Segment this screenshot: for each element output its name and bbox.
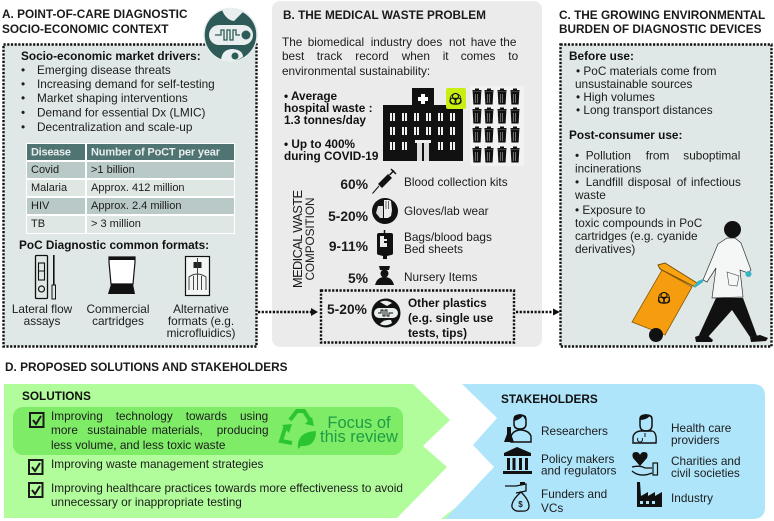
composition row: gloves [328, 198, 489, 224]
blue chevron background [445, 384, 765, 519]
table: PoCT per year: > 3 million [91, 218, 141, 230]
icon: microfluidic format [186, 256, 210, 296]
composition row: bags: Bed sheets [404, 242, 463, 256]
format labels: Commercial [87, 302, 149, 316]
before use list: • PoC materials come from [576, 64, 717, 78]
stakeholder: policy makers [503, 447, 617, 478]
solution 1: technology: technology [116, 409, 173, 423]
post-consumer list: • [575, 148, 579, 162]
format labels [12, 302, 235, 340]
post-consumer list: disposal [628, 175, 671, 189]
solution 1: technology: Improving [51, 409, 103, 423]
logo: diagnostic device circle [204, 8, 257, 61]
market drivers list: Market shaping interventions [37, 91, 188, 105]
post-consumer list: of [677, 175, 687, 189]
panel C heading [559, 8, 765, 36]
stakeholder: health care providers: Health care [671, 421, 732, 435]
panel B: medical waste problem [272, 1, 542, 347]
post-consumer list: infectious [691, 175, 741, 189]
panel C dotted box [560, 44, 772, 346]
focus highlight band [13, 407, 403, 455]
stakeholder: funders: Funders and [541, 487, 607, 501]
icon: orange biohazard bin [632, 263, 697, 342]
dotted callout: other plastics: 5-20% [327, 302, 367, 317]
panel B intro text: when [401, 49, 430, 63]
market drivers list [21, 49, 215, 134]
panel D: solutions chevron [4, 384, 450, 518]
stakeholder: funders: VCs [541, 501, 563, 515]
composition row: nursery items [348, 266, 478, 286]
panel B intro text: the [500, 35, 517, 49]
hospital waste statistics: • Average [284, 89, 338, 103]
solution 1: technology: producing [217, 423, 269, 437]
hospital waste statistics [284, 89, 379, 163]
stakeholder: health care providers [633, 414, 732, 447]
solution 1: technology: sustainable [87, 423, 147, 437]
post-consumer list: Landfill [586, 175, 623, 189]
stakeholder: charities: Charities and [671, 454, 741, 468]
panel B intro text: it [443, 49, 449, 63]
composition row: nursery items: Nursery Items [404, 270, 478, 284]
icon: hospital [383, 88, 463, 161]
composition row: gloves: 5-20% [328, 209, 368, 224]
stakeholder: charities: civil societies [671, 466, 740, 480]
panel D heading: D. PROPOSED SOLUTIONS AND STAKEHOLDERS [5, 360, 288, 374]
composition row: gloves: Gloves/lab wear [404, 204, 489, 218]
panel B intro text: record [355, 49, 389, 63]
post-consumer list: cartridges (e.g. cyanide [575, 229, 698, 243]
panel B intro text: environmental sustainability: [282, 64, 430, 78]
market drivers list: Demand for essential Dx (LMIC) [37, 106, 206, 120]
panel B intro text: comes [461, 49, 496, 63]
stakeholder: health care providers: providers [671, 433, 720, 447]
icon: lateral flow assay [36, 255, 56, 299]
table: PoCT per year: Number of PoCT per year [91, 146, 221, 158]
market drivers list: Decentralization and scale-up [37, 120, 193, 134]
before use list: • High volumes [576, 90, 655, 104]
panel A heading: SOCIO-ECONOMIC CONTEXT [2, 22, 169, 36]
solution 3: healthcare practices: unnecessary or inappropriate testing [51, 495, 242, 509]
post-consumer list: incinerations [575, 162, 641, 176]
panel B intro text: not [449, 35, 466, 49]
icon: biohazard sign [446, 88, 466, 109]
market drivers list: Emerging disease threats [37, 63, 171, 77]
market drivers list: Increasing demand for self-testing [37, 77, 215, 91]
icon: worker in lab coat [693, 221, 768, 342]
dotted callout: other plastics [321, 290, 514, 342]
hospital waste statistics: • Up to 400% [284, 137, 356, 151]
stakeholder: charities [632, 452, 741, 480]
panel C: environmental burden [559, 8, 772, 346]
focus of this review label: Focus of [327, 414, 391, 432]
panel B intro text: industry [371, 35, 412, 49]
panel B intro text [282, 35, 519, 78]
post-consumer list: Pollution [586, 148, 631, 162]
table: PoCT per year: Approx. 2.4 million [91, 200, 182, 212]
panel B intro text: biomedical [308, 35, 364, 49]
panel C heading: C. THE GROWING ENVIRONMENTAL [559, 8, 765, 22]
before use list: • Long transport distances [576, 103, 713, 117]
before use list: unsustainable sources [575, 77, 692, 91]
stakeholder: industry: Industry [671, 491, 713, 505]
format labels: Alternative [173, 302, 229, 316]
green corner remnant [441, 507, 456, 519]
panel A dotted box [4, 44, 256, 346]
panel B heading: B. THE MEDICAL WASTE PROBLEM [283, 8, 486, 22]
table: PoCT per year: Approx. 412 million [91, 182, 185, 194]
solution 1: technology [30, 409, 269, 452]
green chevron background [4, 384, 450, 518]
focus of this review label [320, 414, 398, 446]
stakeholder: researchers: Researchers [541, 424, 608, 438]
before use list: Before use: [569, 49, 634, 63]
panel B intro text: track [317, 49, 342, 63]
dotted callout: other plastics: (e.g. single use [408, 311, 494, 325]
icon: recycling arrows with leaf [281, 411, 316, 449]
format labels: cartridges [92, 314, 144, 328]
rotated label: medical waste composition: MEDICAL WASTE [290, 190, 305, 288]
panel C heading: BURDEN OF DIAGNOSTIC DEVICES [559, 22, 762, 36]
icon: commercial cartridge [108, 256, 136, 294]
dotted callout: other plastics: tests, tips) [408, 326, 467, 340]
dotted callout: other plastics: Other plastics [408, 296, 487, 310]
composition row: nursery items: 5% [348, 271, 368, 286]
solution 1: technology: towards [186, 409, 227, 423]
composition row: bags: Bags/blood bags [404, 230, 492, 244]
hospital waste statistics: during COVID-19 [284, 149, 379, 163]
hospital waste statistics: hospital waste : [284, 101, 372, 115]
format labels: assays [24, 314, 60, 328]
format labels: Lateral flow [12, 302, 73, 316]
solution 1: technology: using [240, 409, 268, 423]
market drivers list: • [21, 91, 25, 105]
stakeholder: funders [505, 482, 607, 515]
arrow: panel B to panel C [516, 308, 560, 316]
solution 1: technology: materials, [152, 423, 203, 437]
stakeholder: industry [637, 482, 713, 507]
post-consumer list: from [646, 148, 669, 162]
format labels: microfluidics) [167, 326, 235, 340]
panel B intro text: best [282, 49, 305, 63]
hospital waste statistics: 1.3 tonnes/day [284, 113, 366, 127]
panel B background [272, 1, 542, 347]
post-consumer list: waste [574, 188, 606, 202]
panel B intro text: The [282, 35, 303, 49]
solution 3: healthcare practices: Improving healthcare practices towards more effectiveness to avoid [51, 481, 403, 495]
arrow: panel A to panel B [258, 308, 318, 316]
stakeholders heading: STAKEHOLDERS [501, 392, 598, 406]
rotated label: medical waste composition: COMPOSITION [303, 198, 317, 280]
panel B intro text: does [417, 35, 442, 49]
composition row: blood collection kits [340, 169, 508, 194]
market drivers list: • [21, 120, 25, 134]
post-consumer list: • Exposure to [575, 203, 646, 217]
solutions heading: SOLUTIONS [22, 389, 91, 403]
table: PoCT per year: Malaria [31, 182, 68, 194]
market drivers list: Socio-economic market drivers: [21, 49, 201, 63]
composition row: bags [329, 230, 492, 259]
composition row: blood collection kits: Blood collection kits [404, 175, 508, 189]
table: PoCT per year: TB [31, 218, 45, 230]
solution 1: technology: more [51, 423, 78, 437]
post-consumer list: Post-consumer use: [569, 128, 682, 142]
table: PoCT per year: >1 billion [91, 164, 135, 176]
post-consumer list: derivatives) [575, 242, 635, 256]
market drivers list: • [21, 63, 25, 77]
focus of this review label: this review [320, 428, 398, 446]
panel A heading: A. POINT-OF-CARE DIAGNOSTIC [2, 7, 188, 21]
composition row: blood collection kits: 60% [340, 177, 368, 192]
panel B intro text: have [471, 35, 497, 49]
rotated label: medical waste composition [290, 190, 317, 288]
market drivers list: • [21, 106, 25, 120]
solution 1: technology: less volume, and less toxic waste [51, 438, 226, 452]
post-consumer list [569, 128, 741, 256]
icon: rows of trash cans [470, 86, 524, 166]
stakeholder: funders: $ [518, 500, 523, 509]
table: PoCT per year: Covid [31, 164, 59, 176]
icon: small diagnostic device [372, 298, 400, 328]
panel A heading [2, 7, 188, 36]
solution 3: healthcare practices [29, 481, 403, 509]
stakeholder: policy makers: Policy makers [541, 452, 615, 466]
post-consumer list: toxic compounds in PoC [575, 216, 703, 230]
format labels: formats (e.g. [168, 314, 234, 328]
stakeholder: policy makers: and regulators [541, 464, 617, 478]
table: PoCT per year: Disease [31, 146, 71, 158]
panel A: point-of-care context [2, 7, 257, 346]
panel D: stakeholders [441, 384, 765, 519]
post-consumer list: suboptimal [683, 148, 740, 162]
table: PoCT per year [26, 143, 235, 234]
composition row: bags: 9-11% [329, 239, 368, 254]
stakeholder: researchers [504, 414, 608, 442]
market drivers list: • [21, 77, 25, 91]
before use list [569, 49, 717, 117]
table: PoCT per year: HIV [31, 200, 50, 212]
panel B intro text: to [508, 49, 519, 63]
solution 2: waste management: Improving waste management strategies [51, 457, 264, 471]
post-consumer list: • [575, 175, 579, 189]
common formats heading: PoC Diagnostic common formats: [19, 238, 209, 252]
